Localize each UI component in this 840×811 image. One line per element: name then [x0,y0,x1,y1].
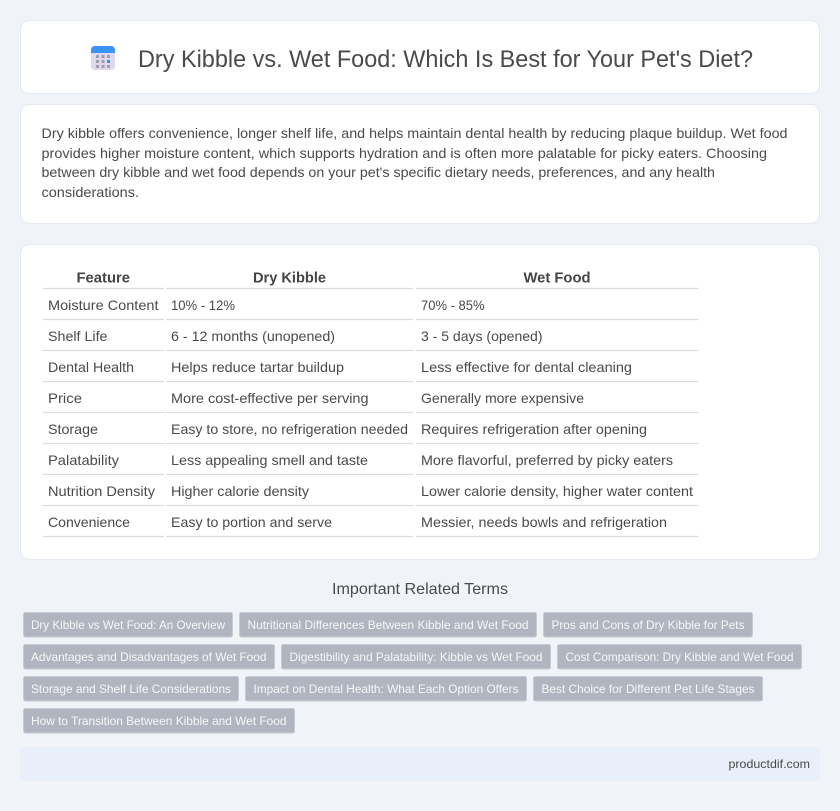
tag: Pros and Cons of Dry Kibble for Pets [552,618,744,632]
row: storage [48,421,647,437]
intro text [42,125,788,200]
tag [558,644,802,669]
tag: Best Choice for Different Pet Life Stages [542,682,754,696]
row: price: More cost-effective per serving [171,390,368,406]
table header row [76,270,590,286]
row: dental health: Helps reduce tartar buildup [171,359,344,375]
row: palatability: Less appealing smell and taste [171,452,368,468]
row: moisture content: Moisture Content [48,297,159,313]
row: moisture content [48,297,484,313]
tag: Advantages and Disadvantages of Wet Food [31,650,266,664]
row: convenience: Convenience [48,514,130,530]
table header row: Feature [76,270,130,286]
row: convenience [48,514,667,530]
tag [544,612,752,637]
row: dental health [48,359,632,375]
header panel [20,20,820,94]
row: palatability: More flavorful, preferred by picky eaters [421,452,673,468]
row: nutrition density: Higher calorie density [171,483,309,499]
tag [24,612,232,637]
tag [282,644,550,669]
row: nutrition density [48,483,693,499]
tag: How to Transition Between Kibble and Wet Food [31,714,286,728]
row: shelf life [48,328,542,344]
intro text: Dry kibble offers convenience, longer shelf life, and helps maintain dental health by reducing plaque buildup. Wet food [42,125,788,141]
icon: calendar grid [91,46,115,70]
footer source text: productdif.com [728,757,810,771]
panel: comparison table [20,244,820,560]
intro text: between dry kibble and wet food depends on your pet's specific dietary needs, preferences, and any health [42,164,715,180]
row: nutrition density: Nutrition Density [48,483,155,499]
row: moisture content: 10% - 12% [171,297,235,313]
tag [240,612,536,637]
row: palatability [48,452,673,468]
tag: Impact on Dental Health: What Each Option Offers [254,682,518,696]
tag [246,676,526,701]
tag: Cost Comparison: Dry Kibble and Wet Food [566,650,794,664]
row: shelf life: 3 - 5 days (opened) [421,328,542,344]
table header row: Wet Food [524,270,590,286]
table header row: Dry Kibble [253,270,326,286]
tag [24,676,238,701]
row: dental health: Dental Health [48,359,134,375]
tag [24,708,294,733]
row: storage: Easy to store, no refrigeration needed [171,421,408,437]
intro text: provides higher moisture content, which supports hydration and is often more palatable for picky eaters. Choosing [42,145,767,161]
tag: Digestibility and Palatability: Kibble vs Wet Food [290,650,542,664]
tag: Dry Kibble vs Wet Food: An Overview [31,618,225,632]
row: price: Generally more expensive [421,390,584,406]
heading: important related terms: Important Related Terms [332,581,508,598]
row: storage: Storage [48,421,98,437]
row: moisture content: 70% - 85% [421,297,484,313]
title: Dry Kibble vs. Wet Food: Which Is Best for Your Pet's Diet? [138,46,753,73]
row: shelf life: 6 - 12 months (unopened) [171,328,335,344]
row: storage: Requires refrigeration after opening [421,421,647,437]
panel: intro [20,104,820,224]
row: dental health: Less effective for dental cleaning [421,359,632,375]
row: nutrition density: Lower calorie density, higher water content [421,483,693,499]
row: shelf life: Shelf Life [48,328,108,344]
tag [534,676,762,701]
row: price: Price [48,390,82,406]
row: convenience: Messier, needs bowls and refrigeration [421,514,667,530]
tag: Storage and Shelf Life Considerations [31,682,231,696]
related terms tags [24,612,802,733]
footer [20,747,820,781]
row: palatability: Palatability [48,452,119,468]
row: convenience: Easy to portion and serve [171,514,332,530]
row: price [48,390,584,406]
intro text: considerations. [42,184,139,200]
tag: Nutritional Differences Between Kibble and Wet Food [248,618,528,632]
tag [24,644,274,669]
